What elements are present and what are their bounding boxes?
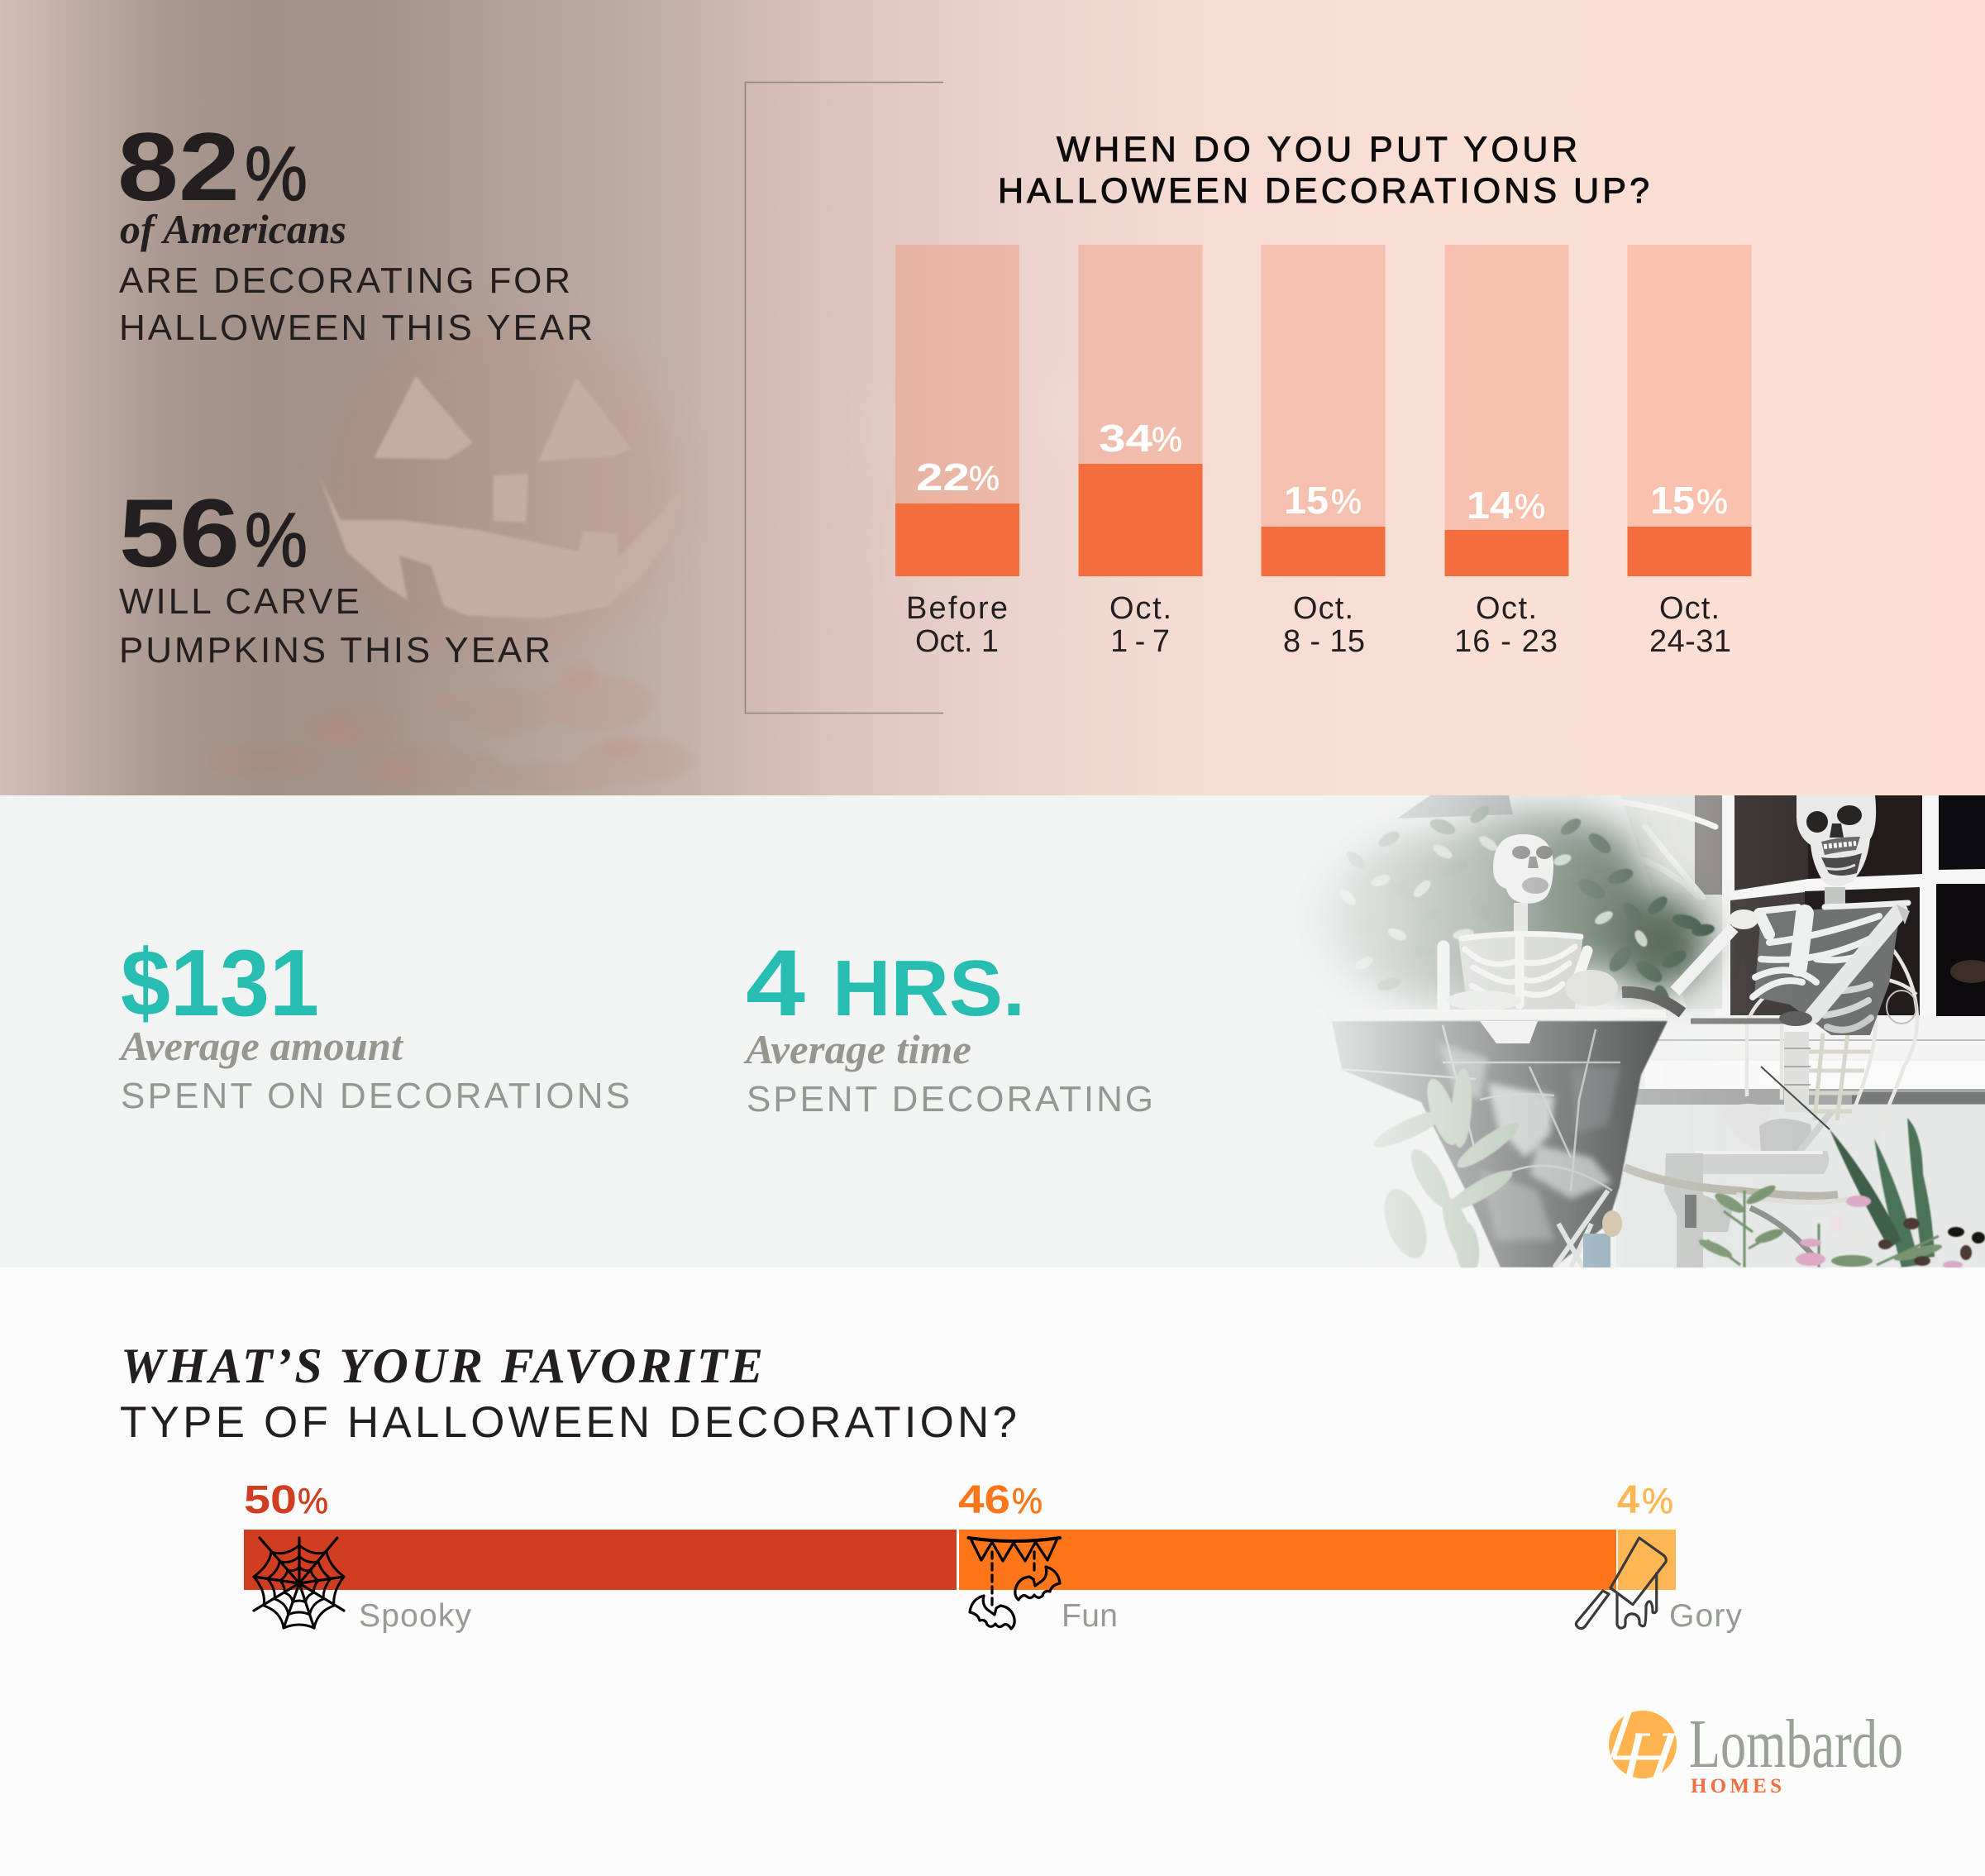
heading: WHAT’S YOUR FAVORITE <box>121 1339 763 1393</box>
label: spooky 50 percent: % <box>298 1481 328 1521</box>
bar: Oct 1-7, 34 percent: 1 - 7 <box>1110 624 1170 659</box>
stat: 82 percent decorating <box>117 112 593 348</box>
panel: favorite decoration type <box>120 1339 1903 1797</box>
chart heading: HALLOWEEN DECORATIONS UP? <box>998 171 1649 211</box>
metal chair behind right skeleton <box>1744 948 1919 1121</box>
image: faded jack-o-lantern <box>207 318 1116 792</box>
chart bracket <box>746 83 943 713</box>
stat: 82 percent decorating: ARE DECORATING FOR <box>119 260 570 301</box>
stat: 56 percent carving pumpkins: % <box>245 497 308 583</box>
stat: average time decorating: HRS. <box>833 944 1025 1033</box>
panel: spending and time statistics with skeleton photo <box>0 795 1985 1276</box>
bar: Oct 1-7, 34 percent <box>1078 245 1202 659</box>
stat: 82 percent decorating: HALLOWEEN THIS YEAR <box>119 308 593 348</box>
stat: average decoration spending: $131 <box>121 931 319 1036</box>
window frame and dark panes <box>1715 795 1985 1019</box>
right skeleton <box>1622 795 1910 1267</box>
bar: Oct 16-23, 14 percent: 14 <box>1467 484 1513 527</box>
label: fun 46 percent: % <box>1012 1481 1043 1521</box>
logo: Lombardo Homes <box>1609 1706 1903 1797</box>
label: gory 4 percent: Gory <box>1669 1598 1743 1634</box>
icon: bunting with bats <box>969 1538 1060 1629</box>
bar: Oct 24-31, 15 percent: 15 <box>1650 479 1695 522</box>
logo: Lombardo Homes: Lombardo <box>1689 1706 1903 1783</box>
dark lace table <box>1332 1021 1668 1267</box>
icon: spider web <box>254 1538 344 1628</box>
bar chart: when decorations go up <box>895 245 1751 659</box>
stat: 82 percent decorating: of Americans <box>120 206 346 252</box>
bar: Oct 8-15, 15 percent: 8 - 15 <box>1283 624 1365 659</box>
stat: average decoration spending: SPENT ON DECORATIONS <box>121 1076 630 1116</box>
stat: 56 percent carving pumpkins <box>119 479 551 671</box>
stat: 56 percent carving pumpkins: WILL CARVE <box>119 581 360 622</box>
shrub foliage behind left skeleton <box>1310 810 1707 1005</box>
bar: Oct 24-31, 15 percent: Oct. <box>1659 591 1720 626</box>
stat: average decoration spending <box>118 931 630 1116</box>
stat: 56 percent carving pumpkins: 56 <box>119 479 240 587</box>
stat: average time decorating: 4 <box>746 931 805 1036</box>
stacked bar: favorite type shares <box>244 1530 1676 1590</box>
thin stem <box>1761 1067 1830 1129</box>
stat: average time decorating <box>743 931 1153 1119</box>
label: fun 46 percent <box>958 1478 1118 1634</box>
table legs and bucket <box>1554 1191 1608 1267</box>
label: fun 46 percent: 46 <box>958 1478 1010 1522</box>
chart heading <box>998 130 1649 211</box>
chair seat <box>1625 1167 1838 1196</box>
panel: decorating statistics with pumpkin background <box>0 0 1985 795</box>
bar: Oct 1-7, 34 percent: % <box>1152 420 1182 459</box>
bar: Oct 24-31, 15 percent: % <box>1696 482 1728 521</box>
bar: before Oct 1, 22 percent: Before <box>906 591 1008 626</box>
stat: average time decorating: SPENT DECORATING <box>747 1079 1153 1119</box>
bar: Oct 1-7, 34 percent: 34 <box>1099 417 1153 460</box>
label: spooky 50 percent: Spooky <box>359 1598 471 1634</box>
stat: 56 percent carving pumpkins: PUMPKINS THIS YEAR <box>119 630 551 671</box>
roof of lantern <box>1397 795 1513 819</box>
wall and sill <box>1936 1016 1985 1017</box>
label: gory 4 percent <box>1617 1478 1743 1634</box>
chart heading: WHEN DO YOU PUT YOUR <box>1057 130 1577 169</box>
label: fun 46 percent: Fun <box>1062 1598 1118 1634</box>
bar: Oct 16-23, 14 percent: 16 - 23 <box>1454 624 1558 659</box>
bar: before Oct 1, 22 percent <box>895 245 1019 659</box>
bar: before Oct 1, 22 percent: 22 <box>916 456 970 499</box>
bar: Oct 24-31, 15 percent <box>1627 245 1751 659</box>
bar: before Oct 1, 22 percent: Oct. 1 <box>915 624 999 659</box>
heading: TYPE OF HALLOWEEN DECORATION? <box>120 1398 1017 1447</box>
logo mark <box>1609 1711 1677 1779</box>
image: skeletons on porch <box>1157 795 1985 1276</box>
heading <box>120 1339 1017 1447</box>
stat: average decoration spending: Average amount <box>118 1023 404 1069</box>
bar: Oct 16-23, 14 percent <box>1445 245 1569 659</box>
bar: Oct 8-15, 15 percent: 15 <box>1284 479 1329 522</box>
white fade over photo <box>1157 795 1819 1267</box>
bar: before Oct 1, 22 percent: % <box>969 459 1000 498</box>
logo: Lombardo Homes: HOMES <box>1691 1775 1782 1797</box>
bar: Oct 1-7, 34 percent: Oct. <box>1109 591 1171 626</box>
curtain with hanging rope <box>1620 795 1722 1009</box>
label: spooky 50 percent: 50 <box>244 1478 297 1522</box>
stat: average time decorating: Average time <box>743 1026 971 1072</box>
label: spooky 50 percent <box>244 1478 471 1634</box>
foreground plants <box>1370 1067 1985 1276</box>
label: gory 4 percent: 4 <box>1617 1478 1639 1522</box>
left skeleton <box>1443 834 1618 1010</box>
bar: Oct 8-15, 15 percent <box>1262 245 1386 659</box>
label: gory 4 percent: % <box>1642 1481 1673 1521</box>
stat: 82 percent decorating: 82 <box>117 112 240 221</box>
bar: Oct 16-23, 14 percent: Oct. <box>1476 591 1537 626</box>
bar: Oct 8-15, 15 percent: Oct. <box>1293 591 1353 626</box>
bar: Oct 24-31, 15 percent: 24-31 <box>1649 624 1731 659</box>
icon: bloody cleaver <box>1576 1538 1666 1629</box>
bar: Oct 8-15, 15 percent: % <box>1331 482 1362 521</box>
stat: 82 percent decorating: % <box>245 131 308 217</box>
table top <box>1311 1010 1666 1021</box>
bar: Oct 16-23, 14 percent: % <box>1515 487 1545 526</box>
